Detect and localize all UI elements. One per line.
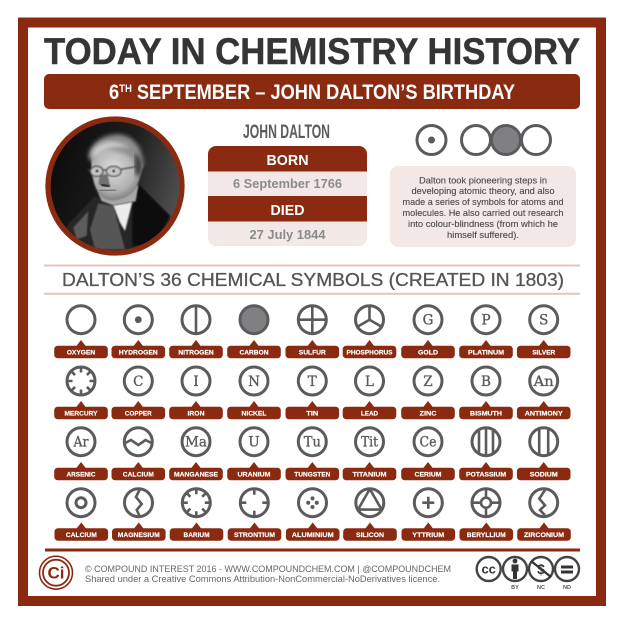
symbol: zirconium: ZIRCONIUM [524, 532, 564, 539]
symbol: arsenic [54, 428, 108, 480]
symbol: silver: SILVER [532, 350, 555, 357]
symbol: manganese: Ma [185, 434, 207, 450]
symbol: gold [401, 306, 455, 358]
symbol: arsenic: Ar [73, 434, 89, 450]
symbol: arsenic: ARSENIC [66, 472, 96, 479]
symbol: carbon: CARBON [240, 350, 269, 357]
symbol: aluminium [286, 489, 340, 541]
symbol: nickel: N [248, 374, 260, 390]
symbol: silver [517, 306, 570, 358]
symbol: copper: C [133, 374, 143, 390]
symbol: beryllium: BERYLLIUM [467, 532, 506, 539]
symbol: silicon [343, 489, 397, 541]
symbol: tungsten [286, 428, 339, 480]
section heading: DALTON’S 36 CHEMICAL SYMBOLS (CREATED IN 1803) [62, 269, 564, 290]
symbol: magnesium [112, 489, 166, 541]
symbol: nitrogen [169, 306, 223, 358]
symbol: manganese: MANGANESE [174, 472, 218, 479]
symbol: barium: BARIUM [184, 532, 210, 539]
symbol: sodium [517, 428, 570, 480]
symbol: oxygen [54, 306, 108, 358]
symbol: tungsten: TUNGSTEN [294, 472, 330, 479]
symbol: zinc: Z [423, 374, 433, 390]
symbol: tin [286, 367, 339, 419]
symbol: phosphorus: PHOSPHORUS [346, 350, 393, 357]
symbol: iron: IRON [188, 411, 205, 418]
born and died table [208, 146, 367, 246]
description box: developing atomic theory, and also [412, 186, 554, 196]
footer credits: © COMPOUND INTEREST 2016 - WWW.COMPOUNDCHEM.COM | @COMPOUNDCHEM [85, 563, 451, 574]
date banner: SEPTEMBER – JOHN DALTON’S BIRTHDAY [132, 81, 515, 104]
symbol: cerium: Ce [420, 434, 437, 450]
title: TODAY IN CHEMISTRY HISTORY [44, 31, 580, 72]
symbol: tungsten: Tu [304, 434, 321, 450]
symbol: gold: G [423, 312, 433, 328]
symbol: iron [169, 367, 223, 419]
symbol: cerium [401, 428, 455, 480]
symbol: titanium: TITANIUM [352, 472, 387, 479]
symbol: copper: COPPER [125, 411, 152, 418]
symbol: nickel: NICKEL [242, 411, 266, 418]
symbol: uranium: URANIUM [238, 472, 271, 479]
name heading: JOHN DALTON [243, 122, 330, 143]
symbol: carbon [227, 306, 281, 358]
symbol: platinum: PLATINUM [468, 350, 504, 357]
symbol: lead [343, 367, 396, 419]
symbol: calcium (wave) [112, 428, 165, 480]
symbol: titanium: Tit [361, 434, 379, 450]
symbol: potassium [459, 428, 513, 480]
symbol: oxygen: OXYGEN [67, 350, 95, 357]
symbol: mercury: MERCURY [64, 411, 98, 418]
symbol: yttrium [402, 489, 455, 541]
footer credits: Shared under a Creative Commons Attribution-NonCommercial-NoDerivatives licence. [85, 573, 440, 584]
icon: creative commons badges: ND [563, 585, 571, 591]
symbol: hydrogen: HYDROGEN [119, 350, 158, 357]
symbol: magnesium: MAGNESIUM [118, 532, 160, 539]
symbol: sodium: SODIUM [530, 472, 558, 479]
portrait of John Dalton [45, 116, 185, 256]
symbol: uranium: U [248, 434, 260, 450]
footer credits [85, 563, 451, 584]
symbol: iron: I [193, 374, 199, 390]
symbol: calcium (ring) [55, 489, 108, 541]
icon: compound interest logo [40, 556, 72, 589]
symbol: calcium (wave): CALCIUM [123, 472, 154, 479]
symbol: lead: LEAD [361, 411, 378, 418]
symbol: silicon: SILICON [356, 532, 384, 539]
born and died table: DIED [270, 203, 304, 219]
date banner: TH [119, 83, 132, 95]
symbol: mercury [54, 367, 108, 419]
symbol: bismuth: B [481, 374, 491, 390]
icon: creative commons badges: BY [511, 585, 519, 591]
symbol: platinum: P [481, 312, 491, 328]
symbol: sulfur [286, 306, 339, 358]
symbol: strontium [228, 489, 281, 541]
symbol: bismuth [459, 367, 513, 419]
symbol: tin: T [308, 374, 317, 390]
description box [390, 166, 576, 247]
description box: molecules. He also carried out research [402, 208, 564, 218]
description box: Dalton took pioneering steps in [419, 175, 547, 185]
icon: molecule symbol [462, 126, 550, 154]
symbol: zirconium [517, 489, 571, 541]
description box: made a series of symbols for atoms and [402, 197, 564, 207]
symbol: nitrogen: NITROGEN [178, 350, 214, 357]
symbol: antimony [517, 367, 570, 419]
symbol: cerium: CERIUM [414, 472, 442, 479]
symbol: titanium [343, 428, 396, 480]
symbol: sulfur: SULFUR [299, 350, 326, 357]
symbol: silver: S [539, 312, 548, 328]
description box: himself suffered). [447, 230, 519, 240]
symbol: antimony: ANTIMONY [525, 411, 563, 418]
symbol: yttrium: YTTRIUM [412, 532, 445, 539]
symbol: antimony: An [533, 374, 554, 390]
icon: creative commons badges [477, 557, 579, 591]
born and died table: BORN [266, 153, 308, 169]
date banner: 6 [109, 81, 121, 104]
symbol: zinc: ZINC [420, 411, 437, 418]
symbol: barium [170, 489, 223, 541]
symbol: lead: L [365, 374, 374, 390]
symbol: calcium (ring): CALCIUM [66, 532, 97, 539]
symbol: platinum [459, 306, 513, 358]
symbol: beryllium [460, 489, 513, 541]
born and died table: 6 September 1766 [233, 176, 342, 191]
icon: hydrogen atom symbol [417, 126, 446, 154]
symbol: uranium [227, 428, 281, 480]
date banner [44, 74, 580, 109]
symbol: strontium: STRONTIUM [234, 532, 275, 539]
born and died table: 27 July 1844 [250, 227, 326, 242]
symbol: copper [112, 367, 165, 419]
description box: into colour-blindness (from which he [408, 219, 558, 229]
symbol: phosphorus [343, 306, 396, 358]
symbol: tin: TIN [306, 411, 318, 418]
symbol: bismuth: BISMUTH [470, 411, 502, 418]
icon: creative commons badges: $ [537, 561, 545, 577]
symbol: aluminium: ALUMINIUM [292, 532, 334, 539]
icon: creative commons badges: NC [537, 585, 545, 591]
symbol: manganese [169, 428, 223, 480]
symbol: hydrogen [112, 306, 165, 358]
icon: compound interest logo: Ci [48, 564, 64, 582]
symbol: potassium: POTASSIUM [466, 472, 506, 479]
symbol: zinc [401, 367, 455, 419]
icon: creative commons badges: cc [481, 562, 496, 576]
symbol: nickel [227, 367, 281, 419]
symbol: gold: GOLD [418, 350, 438, 357]
